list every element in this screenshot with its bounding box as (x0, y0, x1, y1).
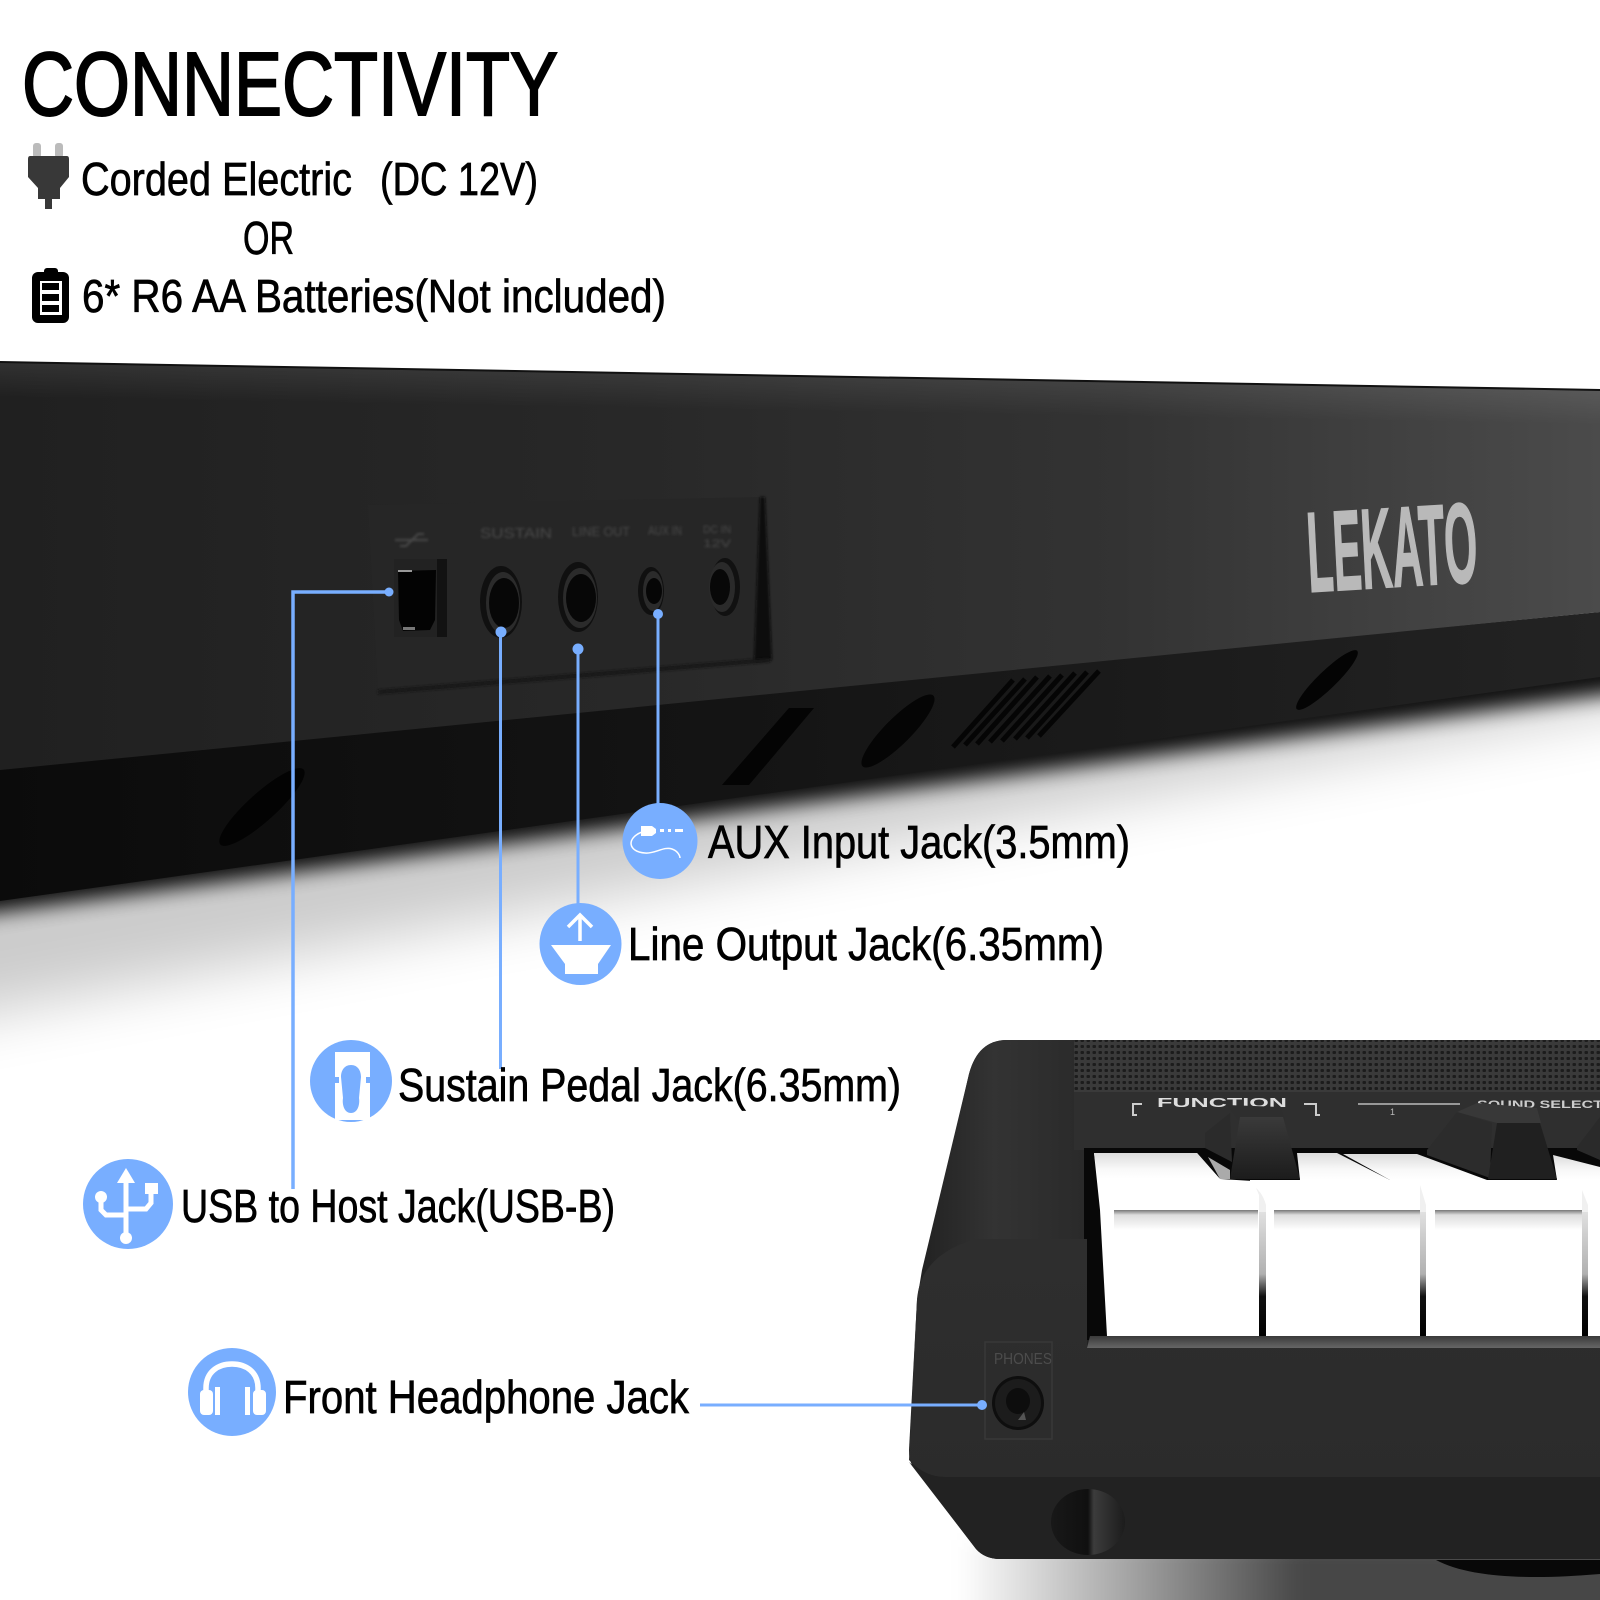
piano front view (909, 1040, 1600, 1600)
text: DC 12V: (DC 12V) (380, 153, 538, 205)
label: Front Headphone Jack (283, 1371, 690, 1423)
front piano shadow (950, 1540, 1600, 1600)
white key 3 (1343, 1154, 1582, 1336)
jack panel (368, 497, 772, 694)
icon: aux cable (622, 803, 698, 879)
leader line (293, 588, 394, 1189)
panel labels: LINE OUT (572, 524, 630, 539)
keybed well (1084, 1103, 1600, 1340)
rear vents and holes (211, 644, 1363, 855)
foot (1051, 1489, 1125, 1555)
white key 4 (1553, 1155, 1600, 1336)
callout: line output (540, 644, 1104, 985)
black key 2 (1427, 1103, 1557, 1179)
panel labels: 12V (703, 538, 732, 550)
sound select rule (1358, 1103, 1460, 1105)
USB symbol (395, 534, 428, 546)
icon: headphones (188, 1348, 276, 1436)
DC jack (709, 558, 740, 616)
control strip: 1 (1390, 1107, 1395, 1117)
icon: plug (28, 143, 69, 209)
leader line (572, 644, 584, 906)
sound select label: SOUND SELECT (1477, 1099, 1600, 1111)
aux jack (638, 567, 664, 615)
speaker grille (1074, 1040, 1600, 1092)
label: AUX Input Jack(3.5mm) (708, 816, 1130, 868)
black key 1 (1205, 1105, 1300, 1179)
panel labels: DC IN (703, 524, 731, 536)
rear lower band (0, 612, 1600, 901)
callout: sustain pedal (310, 626, 901, 1122)
icon: USB (83, 1159, 173, 1249)
leader line (653, 609, 663, 806)
black key 3 (1577, 1117, 1600, 1160)
text: batteries: 6* R6 AA Batteries(Not included) (82, 270, 666, 322)
icon: pedal (310, 1040, 392, 1122)
front block (909, 1239, 1600, 1477)
label: Line Output Jack(6.35mm) (628, 918, 1104, 970)
sustain jack (480, 566, 522, 638)
panel labels: SUSTAIN (480, 525, 552, 542)
floor shadow under rear view (0, 600, 1600, 1048)
leader line (700, 1400, 987, 1410)
key gaps (1250, 1180, 1592, 1336)
panel labels: AUX IN (648, 523, 682, 538)
label: Sustain Pedal Jack(6.35mm) (398, 1059, 901, 1111)
callout: AUX input (622, 609, 1130, 879)
piano rear view (0, 362, 1600, 901)
top case (917, 1040, 1100, 1300)
icon: battery (32, 268, 69, 323)
phones jack recess (985, 1342, 1052, 1439)
headphone jack (992, 1376, 1044, 1430)
line out jack (558, 562, 598, 632)
power option: corded electric (28, 143, 538, 209)
front piano body (909, 1040, 1600, 1559)
panel labels (480, 523, 732, 550)
control strip (1074, 1092, 1600, 1150)
front underside (909, 1462, 1600, 1559)
power option: batteries (32, 268, 666, 323)
white key 2 (1250, 1153, 1420, 1336)
icon: line out (540, 903, 622, 985)
keybed lip (1087, 1336, 1600, 1348)
text: corded electric: Corded Electric (81, 153, 352, 205)
function label: FUNCTION (1157, 1095, 1287, 1110)
label: USB to Host Jack(USB-B) (181, 1180, 615, 1232)
front foot right (1436, 1560, 1600, 1577)
white key 1 (1094, 1153, 1259, 1336)
leader line (496, 626, 506, 1069)
text: OR: OR (243, 212, 294, 264)
title: CONNECTIVITY (22, 35, 558, 135)
USB port (394, 559, 447, 637)
key side strip (1208, 1157, 1230, 1179)
function brackets (1133, 1104, 1320, 1115)
rear upper face (0, 362, 1600, 770)
callout: USB host (83, 588, 615, 1249)
callout: headphone (188, 1348, 987, 1436)
phones label: PHONES (994, 1351, 1052, 1368)
